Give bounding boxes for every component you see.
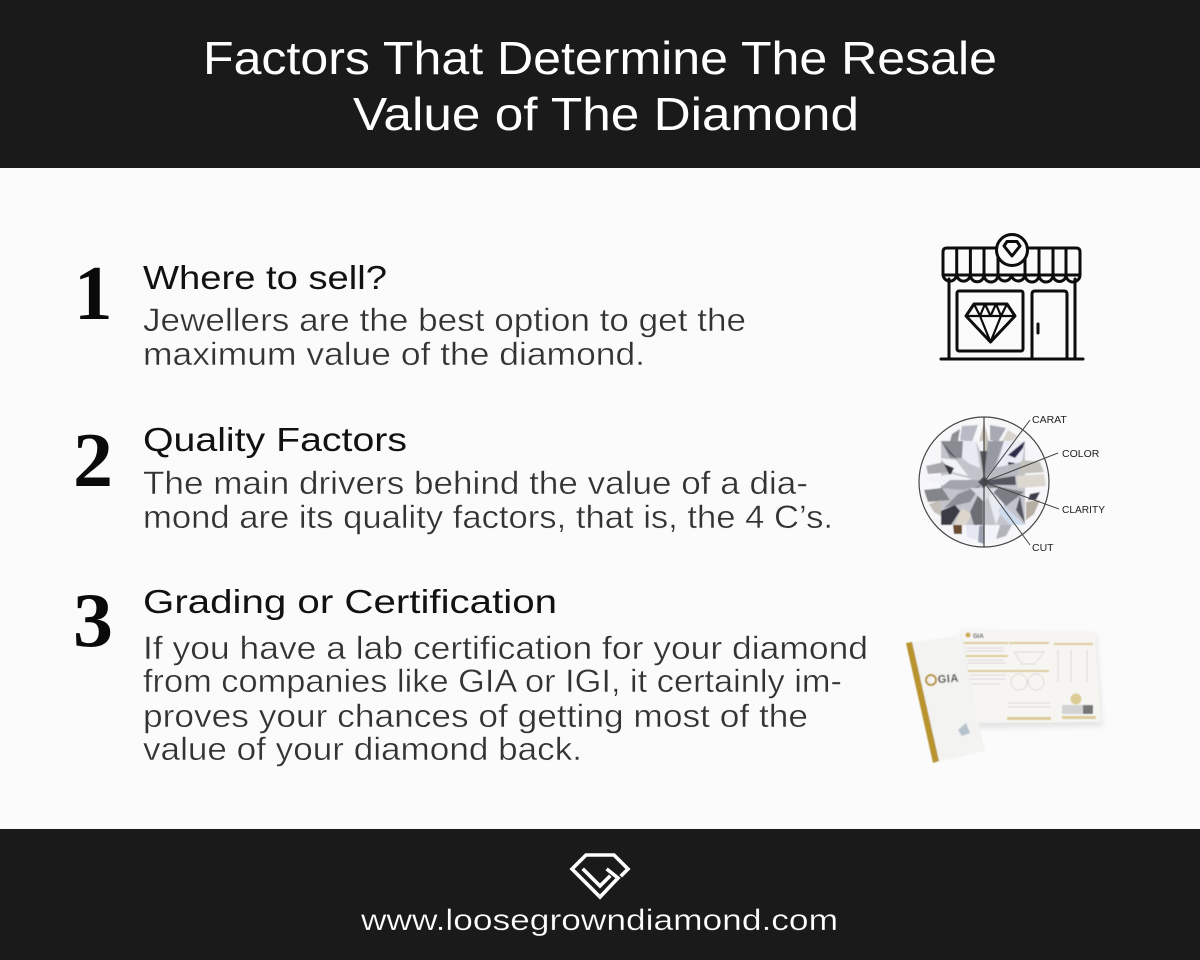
heading: grading or certification: Grading or Certification	[143, 583, 557, 620]
body text: where to sell: maximum value of the diamond.	[143, 336, 645, 372]
labels: 4 C's: CARAT	[1032, 414, 1067, 426]
certificate folder	[906, 636, 985, 763]
body text: grading or certification: value of your diamond back.	[143, 731, 582, 767]
body text: grading or certification: from companies like GIA or IGI, it certainly im-	[143, 663, 842, 699]
image: GIA certificate	[906, 629, 1102, 763]
section 3: grading or certification	[73, 577, 868, 767]
number 1: 1	[74, 250, 112, 336]
labels: 4 C's: CLARITY	[1062, 504, 1105, 516]
body text: quality factors	[143, 465, 833, 535]
body text: quality factors: mond are its quality factors, that is, the 4 C’s.	[143, 499, 833, 535]
body text: where to sell: Jewellers are the best option to get the	[143, 302, 746, 338]
heading: where to sell: Where to sell?	[143, 259, 387, 296]
body text: where to sell	[143, 302, 746, 372]
diagram: diamond with 4 C's	[919, 414, 1105, 554]
icon: logo diamond	[572, 855, 628, 897]
title: Value of The Diamond	[353, 88, 859, 140]
number 3: 3	[73, 577, 113, 663]
header band with title	[0, 0, 1200, 168]
heading: quality factors: Quality Factors	[143, 421, 407, 458]
body text: grading or certification	[143, 630, 868, 767]
labels: 4 C's	[1032, 414, 1105, 554]
body text: grading or certification: If you have a lab certification for your diamond	[143, 630, 868, 666]
website url: www.loosegrowndiamond.com	[360, 904, 838, 937]
diamond facets	[920, 418, 1048, 546]
number 2: 2	[73, 417, 113, 503]
footer band	[0, 829, 1200, 960]
diamond outline and pointer lines	[919, 417, 1059, 547]
certificate sheet: GIA	[973, 634, 984, 640]
section 2: quality factors	[73, 417, 833, 535]
body text: grading or certification: proves your chances of getting most of the	[143, 698, 808, 734]
certificate folder: GIA	[937, 673, 959, 686]
certificate sheet	[961, 629, 1101, 723]
body text: quality factors: The main drivers behind the value of a dia-	[143, 465, 808, 501]
labels: 4 C's: COLOR	[1062, 448, 1100, 460]
labels: 4 C's: CUT	[1032, 542, 1054, 554]
title: Factors That Determine The Resale	[203, 32, 997, 84]
section 1: where to sell	[74, 250, 746, 372]
icon: jewellery store	[941, 234, 1083, 359]
title	[203, 32, 997, 140]
